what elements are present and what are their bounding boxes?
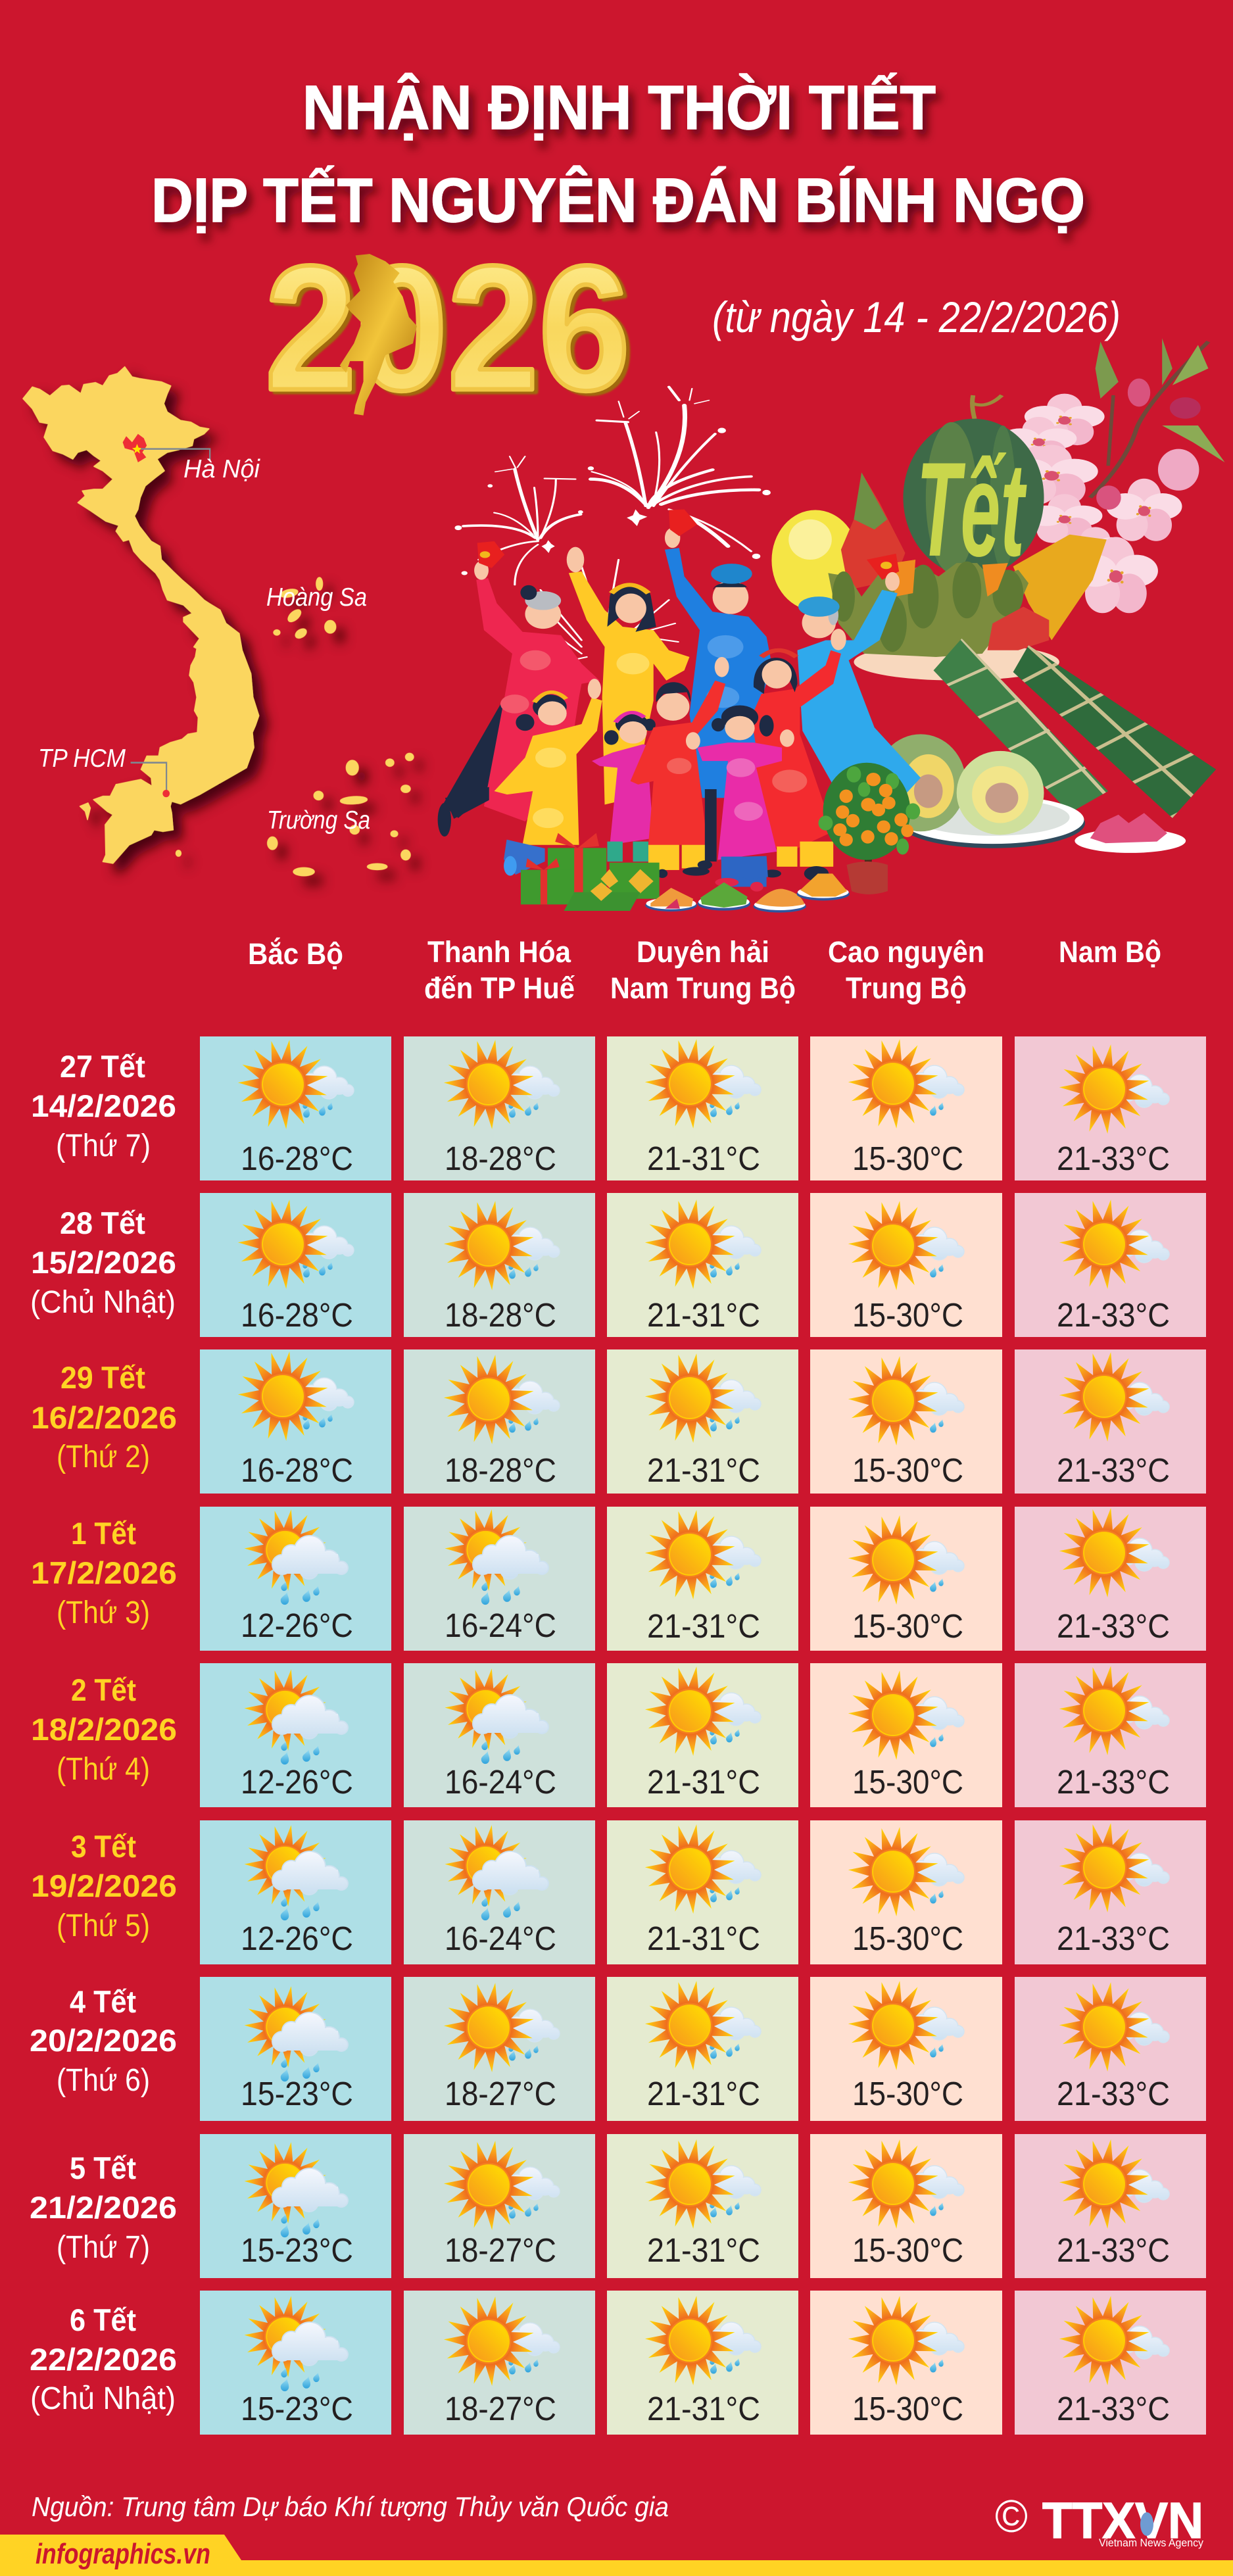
family in ao dai	[438, 509, 921, 887]
cell Nam Bộ	[1015, 1193, 1206, 1337]
cell Thanh Hóa đến TP Huế	[404, 1820, 595, 1964]
child in pink	[592, 712, 669, 862]
cell Thanh Hóa đến TP Huế: 16-24°C	[445, 1763, 556, 1801]
row label: 22/2/2026	[30, 2342, 177, 2377]
cell Nam Bộ: 21-33°C	[1057, 1920, 1170, 1957]
row label: 15/2/2026	[31, 1245, 176, 1280]
row label: (Thứ 6)	[57, 2063, 150, 2098]
cell Duyên hải Nam Trung Bộ	[607, 1507, 798, 1651]
cell Duyên hải Nam Trung Bộ: 21-31°C	[647, 2231, 760, 2269]
row 5 Tết	[30, 2134, 1206, 2278]
row label: 5 Tết	[70, 2151, 136, 2185]
kumquat tree	[819, 763, 920, 865]
cell Bắc Bộ: 15-23°C	[241, 2390, 353, 2427]
cell Cao nguyên Trung Bộ: 15-30°C	[852, 1607, 963, 1645]
cell Bắc Bộ	[200, 1349, 391, 1494]
cell Nam Bộ	[1015, 2291, 1206, 2435]
row 29 Tết	[31, 1349, 1206, 1494]
row label	[30, 1205, 176, 1320]
row label: (Thứ 7)	[56, 1129, 151, 1163]
heading: Duyên hải Nam Trung Bộ	[610, 935, 796, 1005]
row 28 Tết	[30, 1193, 1206, 1337]
title: DỊP TẾT NGUYÊN ĐÁN BÍNH NGỌ	[151, 166, 1085, 235]
cell Nam Bộ	[1015, 1349, 1206, 1494]
TTXVN logo: TTXVN	[1042, 2492, 1203, 2549]
banh chung	[934, 639, 1217, 818]
heading: Duyên hải Nam Trung Bộ: Duyên hải	[637, 935, 769, 969]
cell Duyên hải Nam Trung Bộ	[607, 1820, 798, 1964]
cell Nam Bộ	[1015, 1977, 1206, 2121]
cell Duyên hải Nam Trung Bộ	[607, 2134, 798, 2278]
cell Cao nguyên Trung Bộ: 15-30°C	[852, 2075, 963, 2112]
cell Cao nguyên Trung Bộ: 15-30°C	[852, 1296, 963, 1334]
sticky rice cakes on plate	[875, 734, 1186, 853]
row label: (Thứ 7)	[57, 2230, 150, 2265]
cell Duyên hải Nam Trung Bộ: 21-31°C	[647, 1763, 760, 1801]
row label	[30, 2151, 177, 2265]
row 1 Tết	[31, 1507, 1206, 1651]
row 3 Tết	[31, 1820, 1206, 1964]
heading: Duyên hải Nam Trung Bộ: Nam Trung Bộ	[610, 971, 796, 1005]
cell Bắc Bộ: 15-23°C	[241, 2231, 353, 2269]
cell Duyên hải Nam Trung Bộ: 21-31°C	[647, 1607, 760, 1645]
date range subtitle: (từ ngày 14 - 22/2/2026)	[712, 293, 1121, 341]
cell Nam Bộ: 21-33°C	[1057, 1140, 1170, 1177]
heading: Thanh Hóa đến TP Huế	[424, 935, 575, 1005]
row label: 29 Tết	[60, 1360, 145, 1395]
cell Thanh Hóa đến TP Huế: 18-28°C	[445, 1296, 556, 1334]
cell Bắc Bộ	[200, 1663, 391, 1807]
cell Nam Bộ: 21-33°C	[1057, 1607, 1170, 1645]
cell Bắc Bộ	[200, 2291, 391, 2435]
cell Bắc Bộ: 16-28°C	[241, 1140, 353, 1177]
row label: (Chủ Nhật)	[30, 1285, 176, 1320]
cell Duyên hải Nam Trung Bộ: 21-31°C	[647, 2390, 760, 2427]
title	[151, 73, 1085, 235]
cell Bắc Bộ: 12-26°C	[241, 1920, 353, 1957]
cell Duyên hải Nam Trung Bộ	[607, 1977, 798, 2121]
cell Duyên hải Nam Trung Bộ	[607, 1193, 798, 1337]
row label: (Chủ Nhật)	[30, 2381, 176, 2416]
cell Bắc Bộ: 12-26°C	[241, 1607, 353, 1644]
cell Bắc Bộ	[200, 1977, 391, 2121]
cell Thanh Hóa đến TP Huế: 18-28°C	[445, 1451, 556, 1489]
row label: (Thứ 5)	[57, 1908, 150, 1943]
heading: Cao nguyên Trung Bộ	[828, 935, 984, 1005]
cell Nam Bộ: 21-33°C	[1057, 1296, 1170, 1334]
cell Duyên hải Nam Trung Bộ: 21-31°C	[647, 2075, 760, 2112]
footer band	[0, 2535, 1233, 2576]
row label: 28 Tết	[60, 1205, 145, 1240]
row label: 2 Tết	[71, 1672, 136, 1707]
map label: Trường Sa: Trường Sa	[267, 806, 370, 835]
cell Duyên hải Nam Trung Bộ: 21-31°C	[647, 1140, 760, 1177]
cell Cao nguyên Trung Bộ	[810, 1036, 1002, 1180]
row label: 27 Tết	[60, 1049, 145, 1084]
row label: 21/2/2026	[30, 2190, 177, 2225]
cell Bắc Bộ: 16-28°C	[241, 1451, 353, 1489]
row label: 6 Tết	[70, 2302, 136, 2337]
cell Cao nguyên Trung Bộ: 15-30°C	[852, 1451, 963, 1489]
row label	[31, 1829, 177, 1943]
cell Duyên hải Nam Trung Bộ: 21-31°C	[647, 1920, 760, 1957]
row label: (Thứ 2)	[57, 1440, 150, 1474]
fireworks	[454, 387, 771, 660]
cell Bắc Bộ	[200, 1193, 391, 1337]
gold year 2026 with horse: 2026	[265, 230, 630, 427]
heading: Cao nguyên Trung Bộ: Cao nguyên	[828, 935, 984, 969]
column headings	[248, 935, 1161, 1005]
cell Bắc Bộ	[200, 1036, 391, 1180]
cell Duyên hải Nam Trung Bộ	[607, 1036, 798, 1180]
row 27 Tết	[31, 1036, 1206, 1180]
row label: 17/2/2026	[31, 1555, 177, 1590]
cell Cao nguyên Trung Bộ: 15-30°C	[852, 1763, 963, 1801]
row 2 Tết	[31, 1663, 1206, 1807]
cell Duyên hải Nam Trung Bộ	[607, 1349, 798, 1494]
map of Vietnam	[23, 367, 414, 876]
row label	[31, 1516, 177, 1630]
gifts and plates of food	[439, 787, 888, 913]
cell Bắc Bộ	[200, 2134, 391, 2278]
map label: Hoàng Sa: Hoàng Sa	[266, 583, 367, 612]
cell Cao nguyên Trung Bộ	[810, 2291, 1002, 2435]
young woman in red	[751, 629, 846, 848]
cell Thanh Hóa đến TP Huế	[404, 1663, 595, 1807]
cell Nam Bộ	[1015, 1663, 1206, 1807]
cell Bắc Bộ: 16-28°C	[241, 1296, 353, 1334]
map label: Hà Nội: Hà Nội	[183, 455, 260, 483]
fruit tray with watermelon: Tết	[917, 434, 1027, 584]
cell Cao nguyên Trung Bộ: 15-30°C	[852, 1140, 963, 1177]
cell Nam Bộ	[1015, 1036, 1206, 1180]
cell Thanh Hóa đến TP Huế	[404, 1349, 595, 1494]
cell Cao nguyên Trung Bộ	[810, 1820, 1002, 1964]
row label: 16/2/2026	[31, 1400, 177, 1435]
cell Thanh Hóa đến TP Huế	[404, 2291, 595, 2435]
girl in pink	[686, 705, 794, 887]
cell Cao nguyên Trung Bộ	[810, 2134, 1002, 2278]
illustration: fireworks, family, Tet food	[438, 338, 1229, 913]
father	[665, 509, 771, 798]
cell Nam Bộ: 21-33°C	[1057, 1451, 1170, 1489]
cell Thanh Hóa đến TP Huế: 18-27°C	[445, 2390, 556, 2427]
cell Thanh Hóa đến TP Huế	[404, 1507, 595, 1651]
grandmother in red	[438, 541, 600, 837]
boy in red	[631, 657, 729, 870]
row label: 14/2/2026	[31, 1088, 176, 1123]
cell Nam Bộ	[1015, 1507, 1206, 1651]
row 4 Tết	[30, 1977, 1206, 2121]
cell Cao nguyên Trung Bộ	[810, 1977, 1002, 2121]
TTXVN logo: Vietnam News Agency	[1099, 2537, 1203, 2549]
cell Nam Bộ	[1015, 1820, 1206, 1964]
cell Cao nguyên Trung Bộ: 15-30°C	[852, 2231, 963, 2269]
cell Bắc Bộ	[200, 1820, 391, 1964]
cell Bắc Bộ	[200, 1507, 391, 1651]
cell Cao nguyên Trung Bộ	[810, 1507, 1002, 1651]
cell Thanh Hóa đến TP Huế: 16-24°C	[445, 1920, 556, 1957]
cell Thanh Hóa đến TP Huế: 16-24°C	[445, 1607, 556, 1644]
row label: 4 Tết	[70, 1984, 136, 2019]
cell Bắc Bộ: 15-23°C	[241, 2075, 353, 2112]
child in yellow	[495, 679, 602, 845]
row label	[31, 1049, 176, 1163]
grandmother in light blue	[797, 572, 921, 794]
fruit tray with watermelon	[771, 395, 1107, 681]
cell Nam Bộ: 21-33°C	[1057, 1763, 1170, 1801]
row label	[31, 1672, 177, 1787]
cell Thanh Hóa đến TP Huế	[404, 2134, 595, 2278]
row label: 19/2/2026	[31, 1868, 177, 1903]
cell Cao nguyên Trung Bộ: 15-30°C	[852, 2390, 963, 2427]
cell Nam Bộ: 21-33°C	[1057, 2231, 1170, 2269]
cell Thanh Hóa đến TP Huế: 18-27°C	[445, 2231, 556, 2269]
row label: 18/2/2026	[31, 1712, 177, 1747]
cell Cao nguyên Trung Bộ	[810, 1193, 1002, 1337]
map label: TP HCM: TP HCM	[38, 744, 126, 773]
cell Thanh Hóa đến TP Huế	[404, 1193, 595, 1337]
cell Thanh Hóa đến TP Huế	[404, 1036, 595, 1180]
row 6 Tết	[30, 2291, 1206, 2435]
cell Cao nguyên Trung Bộ	[810, 1663, 1002, 1807]
peach blossom branch	[1001, 338, 1224, 613]
source note: Nguồn: Trung tâm Dự báo Khí tượng Thủy văn Quốc gia	[32, 2491, 669, 2522]
cell Cao nguyên Trung Bộ: 15-30°C	[852, 1920, 963, 1957]
cell Duyên hải Nam Trung Bộ	[607, 1663, 798, 1807]
cell Bắc Bộ: 12-26°C	[241, 1763, 353, 1801]
row label: (Thứ 3)	[57, 1595, 150, 1630]
heading: Thanh Hóa đến TP Huế: đến TP Huế	[424, 971, 575, 1005]
row label: 3 Tết	[71, 1829, 136, 1864]
row label: 20/2/2026	[30, 2023, 177, 2058]
row label: 1 Tết	[71, 1516, 136, 1551]
row label	[30, 1984, 177, 2098]
row label	[31, 1360, 177, 1474]
cell Thanh Hóa đến TP Huế: 18-28°C	[445, 1140, 556, 1177]
title: NHẬN ĐỊNH THỜI TIẾT	[302, 73, 936, 143]
cell Nam Bộ: 21-33°C	[1057, 2390, 1170, 2427]
website label: infographics.vn	[36, 2538, 210, 2570]
cell Nam Bộ: 21-33°C	[1057, 2075, 1170, 2112]
row label	[30, 2302, 177, 2416]
cell Cao nguyên Trung Bộ	[810, 1349, 1002, 1494]
heading: Bắc Bộ: Bắc Bộ	[248, 937, 343, 971]
TTXVN logo: ©	[995, 2491, 1028, 2542]
heading: Nam Bộ: Nam Bộ	[1059, 935, 1161, 969]
cell Thanh Hóa đến TP Huế	[404, 1977, 595, 2121]
cell Thanh Hóa đến TP Huế: 18-27°C	[445, 2075, 556, 2112]
cell Nam Bộ	[1015, 2134, 1206, 2278]
heading: Thanh Hóa đến TP Huế: Thanh Hóa	[427, 935, 571, 969]
heading: Cao nguyên Trung Bộ: Trung Bộ	[846, 971, 967, 1005]
cell Duyên hải Nam Trung Bộ	[607, 2291, 798, 2435]
mother in yellow	[567, 547, 689, 804]
row label: (Thứ 4)	[57, 1752, 150, 1787]
cell Duyên hải Nam Trung Bộ: 21-31°C	[647, 1296, 760, 1334]
cell Duyên hải Nam Trung Bộ: 21-31°C	[647, 1451, 760, 1489]
